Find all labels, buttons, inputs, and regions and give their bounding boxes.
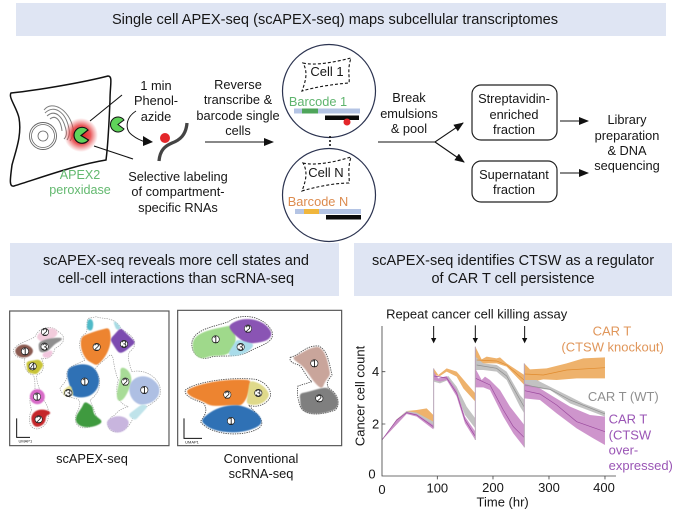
gray bands	[382, 357, 605, 440]
series labels: (CTSW knockout)	[561, 339, 664, 354]
cluster number badges: 1	[228, 417, 234, 428]
reverse transcribe text	[196, 77, 280, 138]
cluster number badges: 3	[238, 343, 244, 354]
line chart: cancer cell count: Cancer cell count	[352, 345, 367, 446]
box: supernatant fraction: fraction	[493, 182, 535, 197]
break emulsions text: & pool	[391, 121, 427, 136]
library preparation text: & DNA	[607, 143, 647, 158]
chart tick labels	[368, 364, 615, 497]
label: APEX2 peroxidase: APEX2	[60, 168, 100, 182]
cluster number badges: 2	[123, 377, 129, 388]
box: supernatant fraction: Supernatant	[479, 167, 549, 182]
box: streptavidin fraction: fraction	[493, 122, 535, 137]
cluster number badges: 1	[34, 392, 40, 403]
line chart: cancer cell count: Time (hr)	[477, 495, 529, 510]
heading: cell states: cell-cell interactions than scRNA-seq	[58, 271, 294, 287]
scatter clusters	[15, 317, 160, 433]
phenol-azide text: Phenol-	[134, 93, 178, 108]
line chart: cancer cell count	[352, 307, 673, 510]
droplet: cell 1	[282, 44, 376, 138]
cluster number badges	[212, 324, 323, 428]
heading: cell states: scAPEX-seq reveals more cell states and	[43, 253, 309, 269]
chart tick labels: 0	[368, 467, 376, 482]
chart tick labels: 200	[482, 480, 504, 495]
heading: CAR T: scAPEX-seq identifies CTSW as a regulator	[372, 253, 654, 269]
phenol-azide text: azide	[141, 109, 171, 124]
curved arrow	[127, 111, 153, 146]
cluster number badges: 3	[66, 389, 72, 400]
reverse transcribe text: Reverse	[214, 77, 262, 92]
series labels: (CTSW	[609, 427, 652, 442]
droplet: cell N: Cell N	[308, 165, 344, 180]
selective labeling text: specific RNAs	[138, 200, 218, 215]
event arrows	[431, 325, 527, 343]
cluster number badges: 1	[142, 386, 148, 397]
cluster number badges: 3	[256, 389, 262, 400]
break emulsions text: Break	[392, 90, 426, 105]
branching arrows	[378, 123, 464, 162]
phenol-azide text	[134, 78, 178, 124]
series labels: expressed)	[609, 458, 673, 473]
selective labeling text: of compartment-	[131, 184, 225, 199]
cluster number badges: 2	[317, 394, 323, 405]
cluster number badges: 2	[94, 343, 100, 354]
cluster number badges: 1	[82, 377, 88, 388]
UMAP panel: conventional scRNA-seq	[178, 310, 342, 446]
caption: conventional scRNA-seq: Conventional	[224, 451, 298, 466]
title banner: Single cell APEX-seq (scAPEX-seq) maps subcellular transcriptomes	[112, 12, 558, 28]
selective labeling text	[128, 169, 228, 215]
break emulsions text	[380, 90, 438, 136]
cluster number badges: 2	[42, 328, 48, 339]
icon: free enzyme	[110, 117, 124, 132]
phenol-azide text: 1 min	[140, 78, 172, 93]
cell with APEX2 peroxidase	[10, 76, 111, 186]
cluster number badges: 2	[36, 415, 42, 426]
axes	[382, 326, 616, 476]
icon: labeled RNA	[159, 123, 187, 161]
chart tick labels: 300	[538, 480, 560, 495]
title banner	[16, 3, 666, 36]
cluster number badges: 4	[30, 362, 36, 373]
chart tick labels: 0	[378, 482, 386, 497]
label: APEX2 peroxidase: peroxidase	[49, 183, 111, 197]
arrows to library preparation	[560, 121, 588, 173]
chart tick labels: 100	[426, 481, 448, 496]
UMAP panel: scAPEX-seq	[10, 311, 169, 446]
chart tick labels: 4	[372, 364, 379, 379]
caption: conventional scRNA-seq: scRNA-seq	[229, 466, 293, 481]
series labels	[561, 323, 673, 473]
series labels: CAR T	[593, 323, 631, 338]
cluster number badges: 1	[213, 335, 219, 346]
cluster number badges: 3	[121, 340, 127, 351]
orange bands	[382, 347, 605, 440]
library preparation text	[594, 112, 660, 173]
label: APEX2 peroxidase	[49, 168, 111, 197]
series labels: CAR T	[609, 411, 647, 426]
cluster number badges: 1	[22, 347, 28, 358]
zoom lines	[90, 95, 133, 159]
reverse transcribe text: barcode single	[196, 108, 280, 123]
droplet: cell 1: Cell 1	[310, 64, 344, 79]
UMAP panel: conventional scRNA-seq: UMAP1	[185, 440, 200, 445]
heading: CAR T: of CAR T cell persistence	[431, 271, 595, 287]
droplet: cell N	[282, 148, 376, 242]
chart tick labels: 2	[372, 417, 379, 432]
chart tick labels: 400	[593, 480, 615, 495]
box: streptavidin fraction	[472, 85, 557, 140]
scatter clusters	[186, 319, 338, 432]
box: streptavidin fraction: enriched	[489, 107, 539, 122]
library preparation text: preparation	[595, 128, 659, 143]
heading: cell states	[10, 243, 339, 296]
arrow	[205, 141, 273, 143]
droplet: cell N: Barcode N	[288, 194, 348, 209]
reverse transcribe text: transcribe &	[204, 92, 273, 107]
reverse transcribe text: cells	[225, 123, 251, 138]
droplet: cell 1: Barcode 1	[289, 94, 347, 109]
UMAP panel: scAPEX-seq: UMAP1	[18, 439, 33, 444]
heading: CAR T	[354, 243, 672, 296]
purple bands	[382, 368, 605, 447]
center lines	[382, 360, 605, 440]
break emulsions text: emulsions	[380, 106, 438, 121]
series labels: CAR T (WT)	[588, 389, 659, 404]
cluster number badges: 1	[312, 359, 318, 370]
library preparation text: sequencing	[594, 158, 660, 173]
caption: conventional scRNA-seq	[224, 451, 298, 481]
dotted connector	[329, 136, 331, 146]
box: supernatant fraction	[472, 161, 557, 202]
series labels: over-	[609, 443, 638, 458]
selective labeling text: Selective labeling	[128, 169, 228, 184]
box: streptavidin fraction: Streptavidin-	[478, 91, 550, 106]
library preparation text: Library	[607, 112, 647, 127]
caption: scAPEX-seq: scAPEX-seq	[56, 451, 128, 466]
icon: enzyme	[74, 127, 88, 143]
cluster number badges: 3	[42, 342, 48, 353]
cluster number badges: 2	[225, 390, 231, 401]
cluster number badges	[21, 328, 148, 426]
cluster number badges: 2	[245, 324, 251, 335]
line chart: cancer cell count: Repeat cancer cell killing assay	[386, 307, 568, 322]
